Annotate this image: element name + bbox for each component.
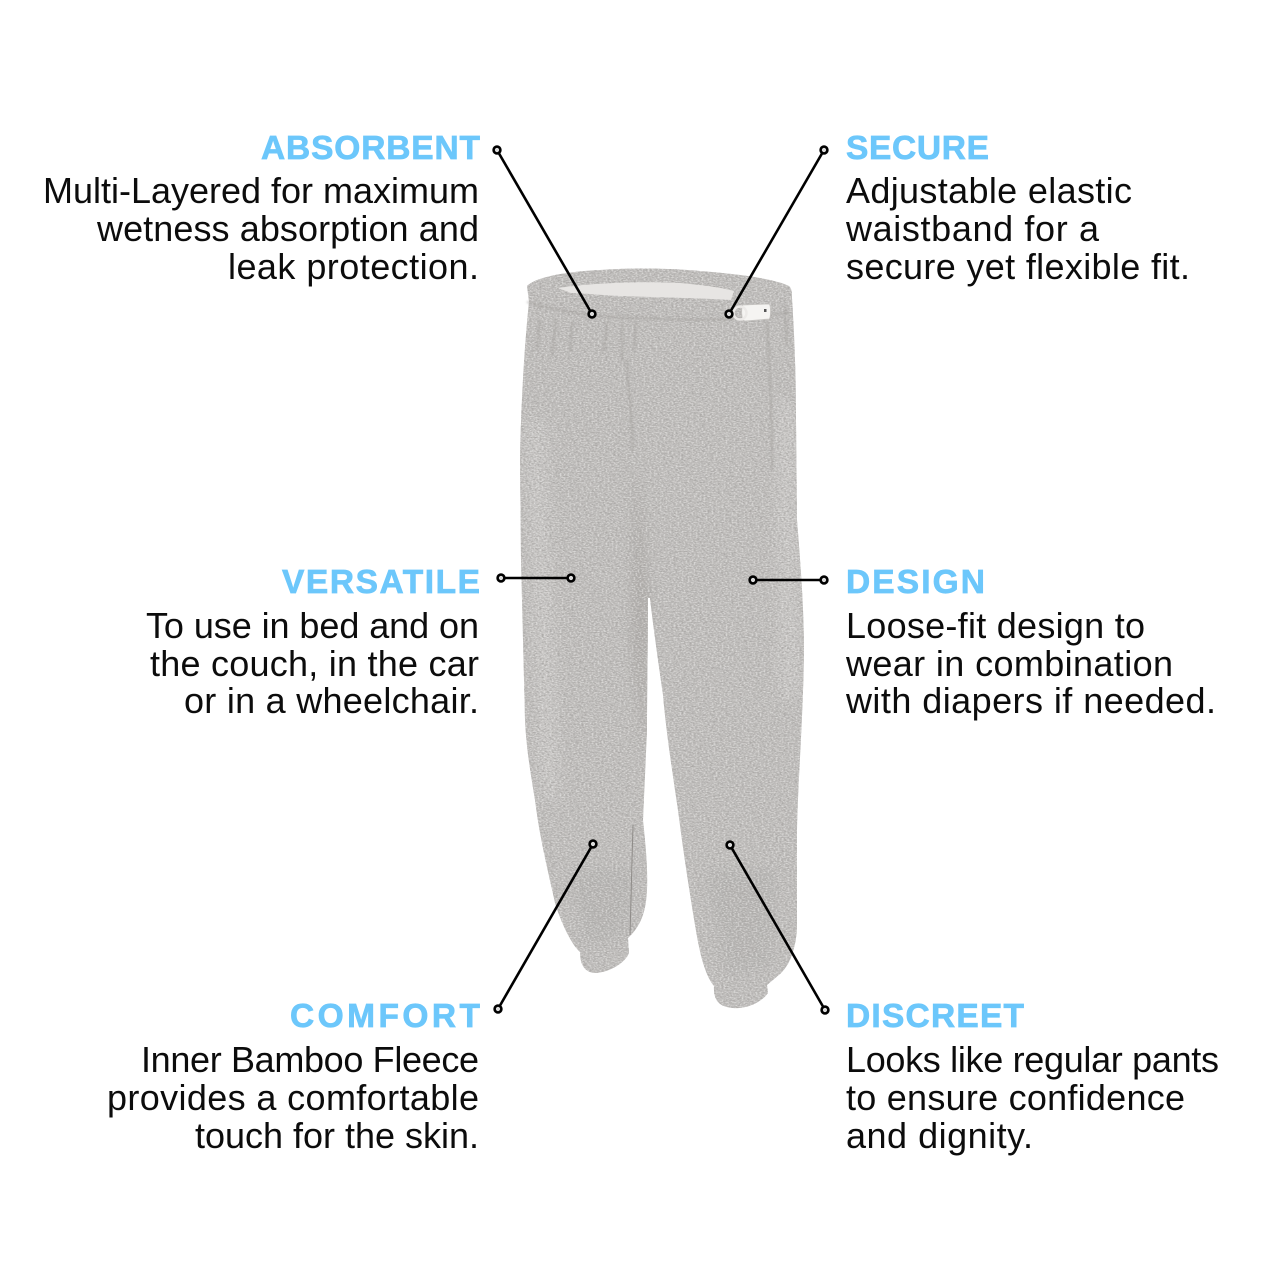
heading: secure: SECURE [846, 130, 989, 167]
description: versatile: To use in bed and on [146, 605, 479, 646]
description: discreet: Looks like regular pants [846, 1039, 1219, 1080]
description: comfort [107, 1039, 479, 1156]
pointer: discreet [727, 842, 828, 1013]
inner bamboo fleece lining [558, 282, 734, 300]
callout: discreet [727, 842, 1219, 1156]
description: absorbent: wetness absorption and [96, 208, 479, 249]
callout: versatile [146, 564, 574, 721]
callout: design [750, 564, 1216, 721]
description: secure: secure yet flexible fit. [846, 246, 1190, 287]
waistband clip [734, 304, 770, 321]
description: design: wear in combination [845, 643, 1173, 684]
description: comfort: Inner Bamboo Fleece [141, 1039, 479, 1080]
description: absorbent: leak protection. [228, 246, 479, 287]
heading: discreet: DISCREET [846, 998, 1025, 1035]
description: absorbent: Multi-Layered for maximum [43, 170, 479, 211]
waistband gathers and fold lines [527, 302, 790, 470]
product image: grey pants [510, 260, 810, 1020]
description: discreet: and dignity. [846, 1115, 1033, 1156]
description: secure: waistband for a [845, 208, 1100, 249]
pointer: versatile [498, 575, 574, 581]
heading: absorbent: ABSORBENT [261, 130, 481, 167]
heading: comfort: COMFORT [290, 998, 481, 1035]
description: versatile: or in a wheelchair. [184, 680, 479, 721]
heading: design: DESIGN [846, 564, 985, 601]
pointer: comfort [495, 841, 596, 1012]
description: design [845, 605, 1216, 721]
pointer: secure [726, 147, 827, 317]
description: discreet [846, 1039, 1219, 1156]
pointer: absorbent [494, 147, 595, 317]
callout: comfort [107, 841, 596, 1156]
description: versatile: the couch, in the car [150, 643, 479, 684]
heading: versatile: VERSATILE [282, 564, 480, 601]
pointer: design [750, 577, 827, 583]
callout: absorbent [43, 130, 595, 317]
description: comfort: provides a comfortable [107, 1077, 479, 1118]
description: absorbent [43, 170, 479, 287]
description: comfort: touch for the skin. [195, 1115, 479, 1156]
callout: secure [726, 130, 1190, 317]
description: secure [845, 170, 1190, 287]
description: versatile [146, 605, 479, 721]
description: secure: Adjustable elastic [846, 170, 1132, 211]
description: design: Loose-fit design to [846, 605, 1145, 646]
description: discreet: to ensure confidence [846, 1077, 1185, 1118]
description: design: with diapers if needed. [845, 680, 1216, 721]
